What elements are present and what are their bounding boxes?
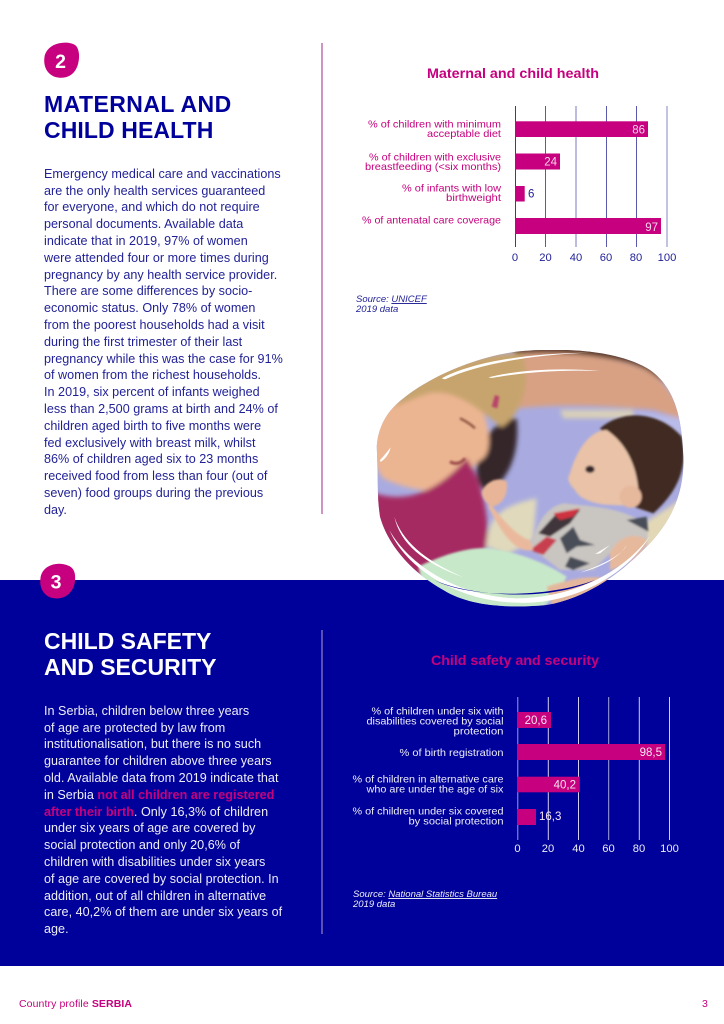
category labels: % of children under six covered	[352, 806, 504, 818]
chart title: Maternal and child health	[427, 66, 599, 81]
source	[352, 889, 498, 910]
category labels: who are under the age of six	[365, 784, 504, 796]
text block: maternal and child health body: for everyone, and which do not require	[44, 200, 260, 214]
heading: maternal and child health: MATERNAL AND	[44, 90, 232, 116]
text block: child safety body: under six years of age are covered by	[44, 821, 255, 835]
axis labels: 20	[542, 843, 554, 855]
text block: child safety body: addition, out of all children in alternative	[44, 889, 266, 903]
category labels: % of children in alternative care	[352, 774, 504, 786]
source	[355, 294, 428, 315]
text block: maternal and child health body: pregnancy by any health service provider.	[44, 268, 277, 282]
category labels: % of children with minimum	[368, 120, 501, 130]
text block: maternal and child health body: 86% of children aged six to 23 months	[44, 452, 258, 466]
text block: maternal and child health body: children aged birth to five months were	[44, 419, 261, 433]
chart title: Child safety and security	[431, 653, 600, 668]
text block: maternal and child health body: were attended four or more times during	[44, 251, 269, 265]
badge: section 3 number	[40, 564, 76, 598]
axis labels: 60	[600, 252, 612, 264]
category labels: % of children under six with	[372, 706, 504, 718]
text block: maternal and child health body: seven) food groups during the previous	[44, 486, 263, 500]
axis labels: 0	[514, 843, 521, 855]
bar values: 97	[645, 222, 658, 234]
footer: country profile: Country profile SERBIA	[19, 998, 132, 1010]
text block: child safety body: In Serbia, children below three years	[44, 704, 249, 718]
category labels	[352, 706, 504, 828]
bar values: 6	[528, 188, 534, 200]
heading: maternal and child health	[44, 90, 232, 142]
panel: blue section background	[0, 580, 724, 966]
text block: child safety body: institutionalisation, but there is no such	[44, 737, 261, 751]
text block: child safety body: after their birth. Only 16,3% of children	[44, 805, 268, 819]
text block: maternal and child health body: received food from less than four (out of	[44, 469, 267, 483]
category labels: % of children with exclusive	[369, 152, 501, 164]
source: Source: National Statistics Bureau	[353, 889, 498, 900]
text block: maternal and child health body: less than 2,500 grams at birth and 24% of	[44, 402, 278, 416]
bar values: 40,2	[554, 780, 576, 792]
bar values	[525, 715, 662, 823]
photo swooshes	[380, 353, 650, 603]
category labels: % of infants with low	[402, 184, 502, 194]
bar values	[528, 124, 658, 234]
text block: maternal and child health body: indicate that in 2019, 97% of women	[44, 234, 248, 248]
axis labels: 80	[633, 843, 645, 855]
text block: maternal and child health body: pregnancy while this was the case for 91%	[44, 352, 283, 366]
text block: child safety body: of age are protected by law from	[44, 721, 225, 735]
axis labels: 20	[539, 252, 552, 264]
axis labels	[514, 843, 679, 855]
text block: maternal and child health body: economic status. Only 78% of women	[44, 301, 255, 315]
heading: maternal and child health: CHILD HEALTH	[44, 116, 213, 142]
bars	[515, 121, 661, 234]
category labels: disabilities covered by social	[366, 716, 504, 728]
source: 2019 data	[352, 899, 395, 910]
axis labels: 60	[602, 843, 615, 855]
text block: maternal and child health body	[44, 167, 283, 517]
text block: maternal and child health body: Emergency medical care and vaccinations	[44, 167, 281, 181]
axis labels: 40	[570, 252, 582, 264]
bar values: 24	[544, 156, 558, 168]
bars	[518, 712, 665, 825]
text block: maternal and child health body: during the first trimester of their last	[44, 335, 242, 349]
axis labels: 80	[630, 252, 642, 264]
axis labels: 40	[572, 843, 585, 855]
text block: maternal and child health body: In 2019, six percent of infants weighed	[44, 385, 260, 399]
text block: child safety body: children with disabilities under six years	[44, 855, 265, 869]
badge: section 2 number: 2	[55, 51, 66, 73]
category labels: % of birth registration	[400, 748, 504, 759]
photo: mother and baby in blob	[376, 350, 684, 606]
text block: maternal and child health body: of women from the richest households.	[44, 368, 261, 382]
text block: maternal and child health body: day.	[44, 503, 67, 517]
chart: child safety and security	[352, 653, 679, 910]
source: 2019 data	[355, 304, 398, 315]
text block: child safety body: care, 40,2% of them are under six years of	[44, 905, 282, 919]
heading: child safety and security: CHILD SAFETY	[44, 628, 211, 654]
heading: child safety and security	[44, 628, 217, 680]
category labels: breastfeeding (<six months)	[365, 162, 501, 173]
text block: child safety body	[44, 704, 282, 936]
bar values: 16,3	[539, 811, 561, 823]
axis labels: 0	[512, 252, 518, 264]
bar values: 20,6	[525, 715, 547, 727]
badge: section 3 number: 3	[51, 572, 62, 594]
text block: child safety body: old. Available data from 2019 indicate that	[44, 771, 278, 785]
bar values: 98,5	[640, 747, 662, 759]
text block: maternal and child health body: personal documents. Available data	[44, 217, 243, 231]
footer: page number: 3	[702, 998, 708, 1010]
bar values: 86	[632, 124, 645, 136]
axis labels	[512, 252, 676, 264]
text block: child safety body: in Serbia not all children are registered	[44, 788, 274, 802]
category labels: by social protection	[408, 816, 504, 828]
chart: maternal and child health	[355, 66, 676, 315]
source: Source: UNICEF	[356, 294, 428, 305]
text block: child safety body: social protection and only 20,6% of	[44, 838, 240, 852]
text block: child safety body: of age are covered by social protection. In	[44, 872, 279, 886]
axis labels: 100	[658, 252, 676, 264]
text block: child safety body: guarantee for children above three years	[44, 754, 272, 768]
text block: maternal and child health body: fed exclusively with breast milk, whilst	[44, 436, 255, 450]
text block: maternal and child health body: from the poorest households had a visit	[44, 318, 265, 332]
heading: child safety and security: AND SECURITY	[44, 654, 217, 680]
text block: maternal and child health body: There are some differences by socio-	[44, 284, 252, 298]
category labels: birthweight	[446, 193, 501, 204]
text block: maternal and child health body: are the only health services guaranteed	[44, 184, 265, 198]
text block: child safety body: age.	[44, 922, 69, 936]
badge: section 2 number	[44, 42, 80, 78]
category labels	[362, 120, 502, 226]
category labels: % of antenatal care coverage	[362, 216, 501, 226]
axis labels: 100	[660, 843, 679, 855]
category labels: acceptable diet	[427, 129, 501, 140]
category labels: protection	[454, 726, 504, 738]
